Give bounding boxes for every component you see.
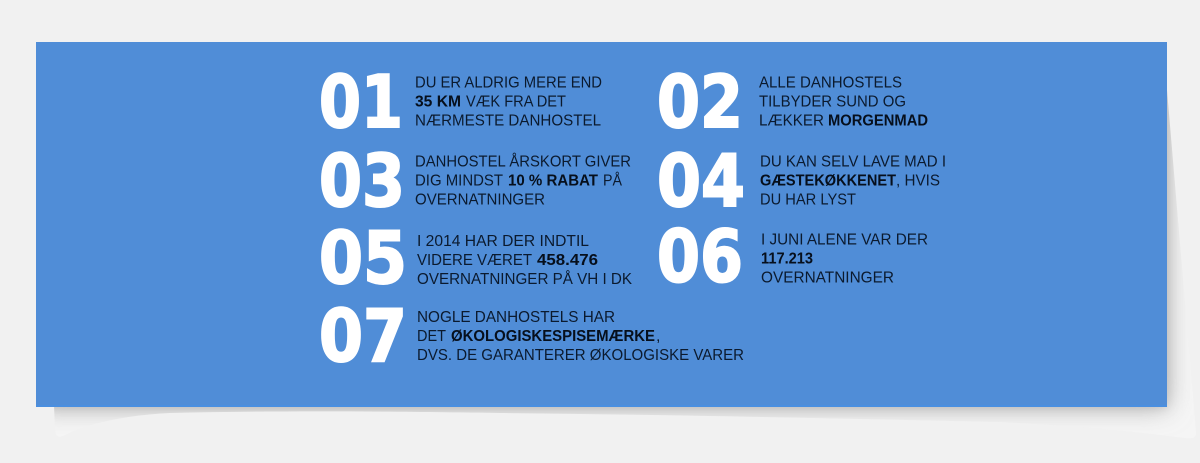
text 02: MORGENMAD — [828, 112, 928, 130]
text 02: TILBYDER SUND OG — [759, 94, 906, 110]
text 02: ALLE DANHOSTELS — [759, 74, 902, 92]
text 07: DVS. DE GARANTERER ØKOLOGISKE VARER — [417, 347, 744, 364]
text 04: DU KAN SELV LAVE MAD I — [760, 154, 946, 170]
item 06 — [657, 214, 928, 298]
text 04: GÆSTEKØKKENET — [760, 172, 896, 190]
text 06: I JUNI ALENE VAR DER — [761, 232, 928, 248]
text 04 — [760, 154, 946, 208]
text 05: 458.476 — [537, 252, 598, 269]
text 01: NÆRMESTE DANHOSTEL — [415, 112, 601, 130]
text 07 — [417, 309, 744, 364]
item 02: 02 — [657, 60, 743, 144]
text 03: DANHOSTEL ÅRSKORT GIVER — [415, 152, 631, 170]
text 05 — [417, 233, 632, 288]
text 02 — [759, 74, 928, 130]
item 02 — [657, 60, 928, 144]
text 07: NOGLE DANHOSTELS HAR — [417, 309, 615, 326]
item 05: 05 — [319, 216, 407, 300]
text 06: OVERNATNINGER — [761, 270, 894, 286]
text 01 — [415, 74, 602, 130]
item 04: 04 — [657, 139, 745, 223]
item 06: 06 — [657, 214, 743, 298]
text 06: 117.213 — [761, 250, 813, 268]
item 07: 07 — [319, 294, 407, 378]
text 02: LÆKKER — [759, 112, 824, 130]
text 01: VÆK FRA DET — [466, 94, 566, 110]
item 01 — [319, 60, 602, 144]
item 05 — [319, 216, 632, 300]
text 05: VIDERE VÆRET — [417, 252, 532, 269]
text 03: OVERNATNINGER — [415, 192, 545, 208]
item 07 — [319, 294, 744, 378]
text 07: , — [656, 328, 660, 345]
item 03 — [319, 139, 631, 223]
text 01: DU ER ALDRIG MERE END — [415, 74, 602, 92]
text 03: DIG MINDST — [415, 172, 503, 190]
text 01: 35 KM — [415, 94, 461, 110]
text 06 — [761, 232, 928, 286]
text 07: DET — [417, 328, 446, 345]
text 07: ØKOLOGISKESPISEMÆRKE — [451, 328, 655, 345]
paper curl shadow — [54, 91, 1179, 420]
item 03: 03 — [319, 139, 405, 223]
item 04 — [657, 139, 946, 223]
text 03 — [415, 152, 631, 208]
text 03: PÅ — [603, 170, 622, 190]
text 05: I 2014 HAR DER INDTIL — [417, 233, 589, 250]
panel: blue card — [36, 42, 1167, 407]
text 05: OVERNATNINGER PÅ VH I DK — [417, 269, 632, 288]
text 03: 10 % RABAT — [508, 172, 598, 190]
text 04: DU HAR LYST — [760, 192, 856, 208]
text 04: , HVIS — [896, 172, 940, 190]
item 01: 01 — [319, 60, 403, 144]
